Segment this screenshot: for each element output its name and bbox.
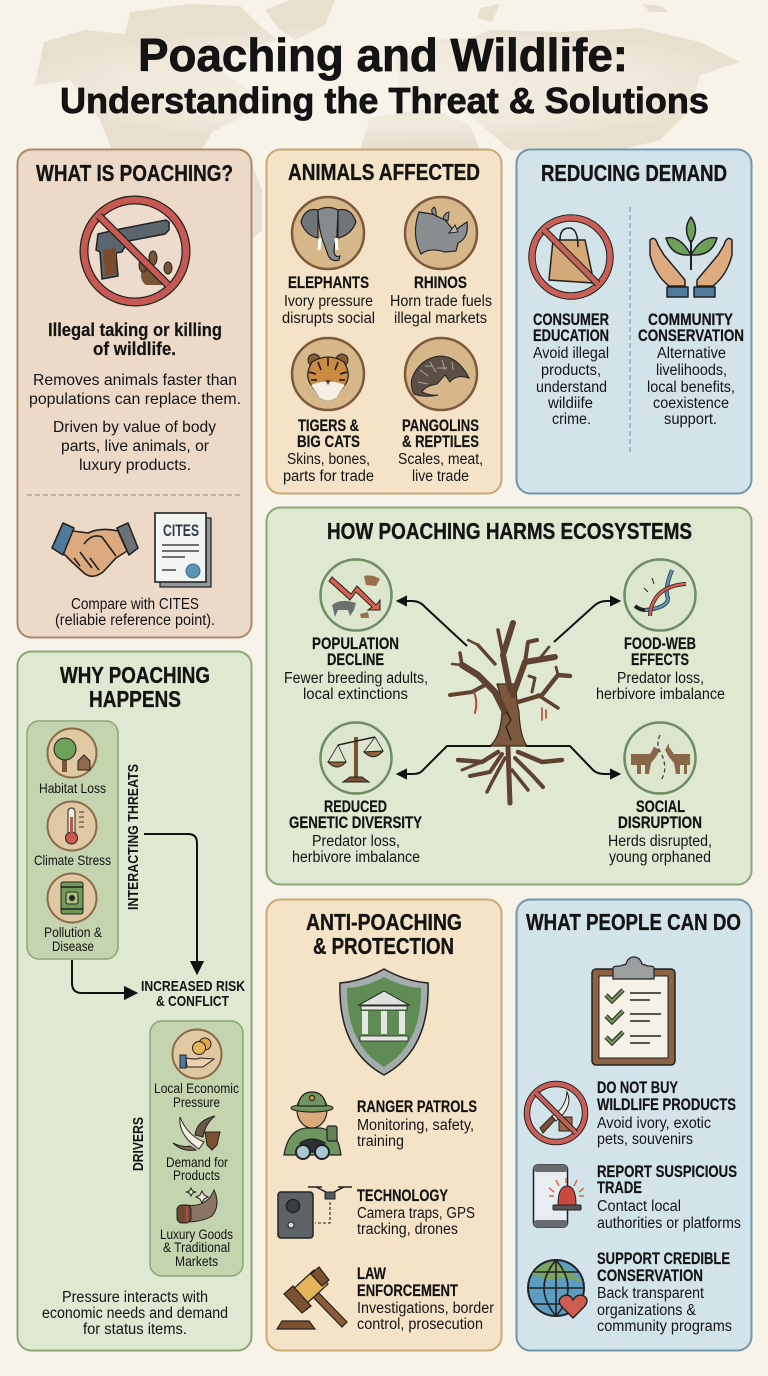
text: technology: TECHNOLOGY (357, 1187, 448, 1205)
text: food-web effects: Predator loss, (617, 670, 704, 687)
group: interacting threats (27, 721, 118, 959)
label: increased risk and conflict: INCREASED RISK (141, 978, 245, 995)
text: technology: tracking, drones (357, 1221, 458, 1238)
text: ranger patrols: training (357, 1133, 404, 1150)
text: community conservation: coexistence (653, 395, 729, 412)
icon: phone alarm (534, 1165, 584, 1227)
background: world map (4, 0, 764, 300)
text: technology: Camera traps, GPS (357, 1205, 475, 1222)
text: rhinos: Horn trade fuels (390, 293, 492, 310)
heading: anti-poaching (306, 909, 462, 959)
text: reduced genetic diversity: Predator loss, (312, 833, 400, 850)
label: local economic pressure (154, 1080, 239, 1110)
text: ranger patrols (357, 1098, 477, 1150)
text: consumer education: crime. (552, 411, 591, 428)
icon: no shopping bag (532, 218, 610, 296)
panel: what people can do (516, 900, 752, 1350)
text: law enforcement: control, prosecution (357, 1316, 483, 1333)
text: definition: populations can replace them. (29, 391, 241, 408)
icon: habitat loss (48, 728, 96, 778)
icon: genetic diversity scales (320, 722, 392, 794)
text: elephants (282, 274, 375, 327)
label: luxury goods and traditional markets: & Traditional (163, 1239, 230, 1255)
label: luxury goods and traditional markets (160, 1226, 233, 1269)
text: support credible conservation: Back transparent (597, 1285, 705, 1302)
label: interacting threats: INTERACTING THREATS (125, 764, 142, 910)
text: definition: Removes animals faster than (33, 372, 237, 389)
label: increased risk and conflict (141, 978, 245, 1010)
heading: why poaching happens: WHY POACHING (60, 662, 210, 688)
text: law enforcement: Investigations, border (357, 1300, 494, 1317)
text: consumer education: EDUCATION (533, 327, 609, 345)
text: definition: Illegal taking or killing (48, 320, 222, 340)
text: support credible conservation: organizations & (597, 1302, 697, 1319)
icon: damaged tree (450, 623, 570, 803)
icon: social disruption (624, 722, 696, 794)
text: community conservation: CONSERVATION (638, 327, 744, 345)
text: food-web effects (596, 635, 725, 703)
arrow: tree to social disruption (526, 746, 619, 778)
text: consumer education: wildiife (547, 395, 593, 412)
text: pangolins (398, 417, 483, 485)
icon: luxury goods (177, 1188, 217, 1223)
text: food-web effects: EFFECTS (631, 651, 689, 669)
label: habitat loss: Habitat Loss (39, 780, 106, 796)
icon: globe and heart (528, 1260, 587, 1318)
text: consumer education: products, (541, 362, 601, 379)
panel: reducing demand (516, 150, 752, 494)
icon: rhino (405, 197, 477, 269)
text: rhinos: illegal markets (394, 310, 487, 327)
icon: food web DNA (624, 560, 696, 630)
arrow: tree to food-web effects (554, 597, 619, 642)
text: tigers: parts for trade (283, 468, 374, 485)
arrow: tree to population decline (398, 597, 467, 646)
icon: no gun and paw (84, 200, 186, 302)
text: report suspicious trade: Contact local (597, 1198, 681, 1215)
group: drivers (150, 1021, 243, 1276)
icon: CITES document (155, 513, 211, 587)
text: do not buy: DO NOT BUY (597, 1079, 678, 1097)
text: support credible conservation: CONSERVATION (597, 1267, 703, 1285)
text: consumer education (533, 311, 609, 428)
icon: demand for products (173, 1116, 220, 1150)
text: definition: of wildlife. (93, 339, 176, 359)
text: elephants: Ivory pressure (284, 293, 373, 310)
heading: reducing demand: REDUCING DEMAND (541, 160, 727, 186)
text: closing note: economic needs and demand (42, 1305, 228, 1322)
text: support credible conservation (597, 1250, 732, 1335)
icon: shield (340, 969, 428, 1075)
panel: why poaching happens (18, 652, 252, 1350)
icon: gavel (277, 1267, 347, 1329)
text: definition: Driven by value of body (53, 419, 216, 436)
panel: anti-poaching and protection (266, 900, 502, 1350)
text: pangolins: & REPTILES (402, 433, 479, 451)
label: pollution & disease: Disease (52, 938, 94, 954)
heading: harms ecosystems: HOW POACHING HARMS ECOSYSTEMS (327, 518, 692, 544)
arrow: group to risk (72, 960, 136, 998)
label: luxury goods and traditional markets: Markets (175, 1253, 218, 1269)
text: social disruption: young orphaned (609, 849, 711, 866)
title: Understanding the Threat & Solutions (60, 80, 709, 121)
icon: population decline (320, 560, 392, 630)
icon: CITES document: CITES (163, 521, 199, 540)
heading: why poaching happens (60, 662, 210, 712)
text: ranger patrols: Monitoring, safety, (357, 1117, 474, 1134)
text: closing note (42, 1289, 228, 1338)
heading: what is poaching: WHAT IS POACHING? (36, 160, 233, 186)
text: social disruption (608, 798, 712, 866)
text: definition: parts, live animals, or (61, 438, 210, 455)
text: law enforcement (357, 1265, 494, 1333)
label: drivers: DRIVERS (130, 1117, 147, 1171)
text: consumer education: CONSUMER (533, 311, 609, 329)
text: social disruption: SOCIAL (636, 798, 685, 816)
title: Poaching and Wildlife: (138, 29, 628, 81)
text: community conservation: livelihoods, (656, 362, 727, 379)
icon: pollution barrel (48, 874, 96, 922)
text: report suspicious trade (597, 1163, 741, 1232)
text: social disruption: DISRUPTION (618, 814, 702, 832)
text: report suspicious trade: authorities or platforms (597, 1215, 741, 1232)
panel: what is poaching (18, 150, 252, 638)
arrow: tree to genetic diversity (398, 746, 491, 778)
text: population decline: local extinctions (303, 686, 408, 703)
heading: anti-poaching: ANTI-POACHING (306, 909, 462, 935)
panel: how poaching harms ecosystems (266, 508, 752, 884)
text: community conservation (638, 311, 744, 428)
label: demand for products: Demand for (166, 1154, 228, 1170)
arrow: threats to risk (144, 834, 202, 973)
text: social disruption: Herds disrupted, (608, 833, 712, 850)
text: reduced genetic diversity: herbivore imbalance (292, 849, 420, 866)
text: do not buy: pets, souvenirs (597, 1131, 693, 1148)
text: law enforcement: ENFORCEMENT (357, 1282, 458, 1300)
label: demand for products (166, 1154, 228, 1183)
label: climate stress: Climate Stress (34, 852, 111, 868)
text: tigers (283, 417, 374, 485)
text: population decline: POPULATION (312, 635, 399, 653)
text: ranger patrols: RANGER PATROLS (357, 1098, 477, 1116)
text: support credible conservation: SUPPORT CREDIBLE (597, 1250, 730, 1268)
text: closing note: Pressure interacts with (62, 1289, 208, 1306)
label: local economic pressure: Pressure (173, 1094, 220, 1110)
icon: camera and drone (278, 1187, 352, 1238)
text: CITES note: Compare with CITES (71, 596, 199, 613)
icon: ranger (284, 1092, 341, 1159)
text: pangolins: Scales, meat, (398, 451, 483, 468)
text: tigers: TIGERS & (298, 417, 359, 435)
text: CITES note: (reliabie reference point). (55, 612, 215, 629)
text: tigers: Skins, bones, (287, 451, 370, 468)
label: luxury goods and traditional markets: Luxury Goods (160, 1226, 233, 1242)
text: law enforcement: LAW (357, 1265, 386, 1283)
label: pollution & disease (44, 924, 103, 954)
text: do not buy (597, 1079, 736, 1148)
label: pollution & disease: Pollution & (44, 924, 103, 940)
text: rhinos: RHINOS (414, 274, 467, 292)
icon: clipboard checklist (592, 957, 675, 1065)
text: tigers: BIG CATS (297, 433, 360, 451)
icon: do not buy (527, 1084, 585, 1142)
text: report suspicious trade: REPORT SUSPICIOUS (597, 1163, 737, 1181)
text: reduced genetic diversity: GENETIC DIVERSITY (289, 814, 422, 832)
text: support credible conservation: community programs (597, 1318, 732, 1335)
text: do not buy: WILDLIFE PRODUCTS (597, 1096, 736, 1114)
text: community conservation: Alternative (657, 345, 726, 362)
text: definition (29, 320, 241, 474)
panel: animals affected (266, 150, 502, 494)
text: community conservation: local benefits, (647, 379, 735, 396)
icon: elephant (292, 197, 364, 269)
text: report suspicious trade: TRADE (597, 1179, 642, 1197)
title (60, 29, 709, 121)
text: population decline: DECLINE (327, 651, 384, 669)
label: increased risk and conflict: & CONFLICT (156, 993, 229, 1010)
label: local economic pressure: Local Economic (154, 1080, 239, 1096)
text: reduced genetic diversity (289, 798, 422, 866)
text: reduced genetic diversity: REDUCED (324, 798, 387, 816)
text: consumer education: understand (536, 379, 607, 396)
icon: tiger (292, 338, 364, 410)
text: community conservation: support. (664, 411, 717, 428)
icon: local economic pressure (172, 1030, 222, 1078)
icon: climate stress (48, 802, 96, 850)
text: population decline (284, 635, 428, 703)
text: elephants: disrupts social (282, 310, 375, 327)
heading: animals affected: ANIMALS AFFECTED (288, 159, 480, 185)
text: technology (357, 1187, 475, 1238)
text: consumer education: Avoid illegal (533, 345, 609, 362)
text: elephants: ELEPHANTS (288, 274, 369, 292)
heading: anti-poaching: & PROTECTION (313, 933, 454, 959)
heading: why poaching happens: HAPPENS (89, 686, 181, 712)
text: community conservation: COMMUNITY (648, 311, 733, 329)
icon: handshake (52, 523, 138, 576)
icon: pangolin (405, 338, 477, 410)
text: do not buy: Avoid ivory, exotic (597, 1115, 711, 1132)
text: population decline: Fewer breeding adults, (284, 670, 428, 687)
label: demand for products: Products (173, 1167, 220, 1183)
icon: hands and plant (650, 217, 732, 297)
text: closing note: for status items. (83, 1321, 187, 1338)
text: food-web effects: herbivore imbalance (596, 686, 725, 703)
text: pangolins: PANGOLINS (402, 417, 479, 435)
text: CITES note (55, 596, 215, 629)
text: pangolins: live trade (412, 468, 469, 485)
text: food-web effects: FOOD-WEB (624, 635, 696, 653)
text: rhinos (390, 274, 492, 327)
text: definition: luxury products. (79, 457, 191, 474)
